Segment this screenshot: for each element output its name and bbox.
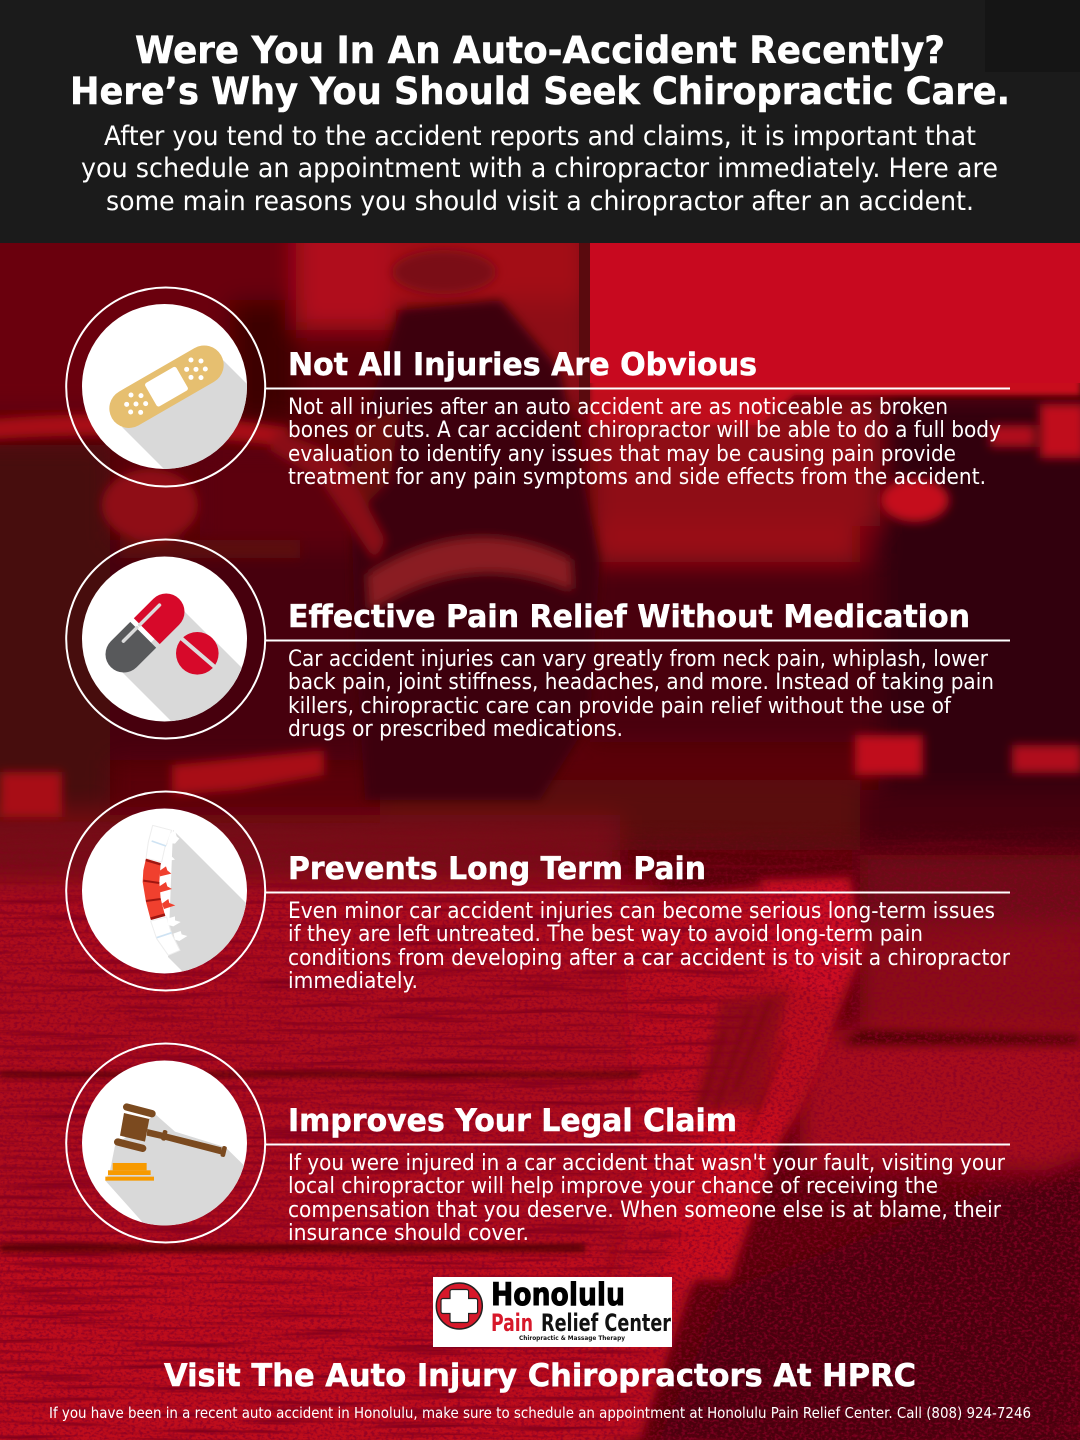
body text: drugs or prescribed medications. — [288, 716, 623, 742]
icon: red cross — [436, 1283, 482, 1329]
body text: killers, chiropractic care can provide pain relief without the use of — [288, 693, 952, 719]
footer heading: Visit The Auto Injury Chiropractors At HPRC — [164, 1358, 916, 1394]
firefighter — [392, 250, 496, 294]
body text: local chiropractor will help improve your chance of receiving the — [288, 1173, 938, 1199]
body text — [288, 1150, 1006, 1246]
body text: insurance should cover. — [288, 1220, 529, 1246]
body text: immediately. — [288, 968, 418, 994]
logo: Honolulu Pain Relief Center: Pain — [491, 1309, 533, 1337]
body text: treatment for any pain symptoms and side effects from the accident. — [288, 464, 986, 490]
heading: Not All Injuries Are Obvious — [288, 347, 757, 383]
intro text: some main reasons you should visit a chiropractor after an accident. — [106, 186, 974, 217]
panel: effective pain relief without medication — [65, 538, 1010, 740]
body text: If you were injured in a car accident that wasn't your fault, visiting your — [288, 1150, 1006, 1176]
header band — [0, 0, 1080, 243]
road — [0, 885, 660, 1245]
intro text: After you tend to the accident reports and claims, it is important that — [104, 121, 976, 152]
heading: Effective Pain Relief Without Medication — [288, 599, 970, 635]
body text: bones or cuts. A car accident chiropractor will be able to do a full body — [288, 417, 1001, 443]
heading: Improves Your Legal Claim — [288, 1103, 737, 1139]
body text: compensation that you deserve. When someone else is at blame, their — [288, 1197, 1002, 1223]
curb — [560, 877, 860, 1440]
title: Were You In An Auto-Accident Recently? — [135, 29, 945, 72]
logo: Honolulu Pain Relief Center: Chiropractic & Massage Therapy — [519, 1334, 626, 1342]
body text: evaluation to identify any issues that may be causing pain provide — [288, 441, 956, 467]
car roof arc and blobs — [0, 414, 290, 446]
logo: Honolulu Pain Relief Center — [433, 1277, 672, 1347]
body text — [288, 646, 994, 742]
body text: back pain, joint stiffness, headaches, and more. Instead of taking pain — [288, 669, 994, 695]
panel: not all injuries are obvious — [65, 286, 1010, 488]
intro text — [81, 121, 998, 217]
icon: bandage — [65, 286, 266, 488]
icon: spine — [65, 790, 266, 992]
heading: Prevents Long Term Pain — [288, 851, 706, 887]
icon: pills — [65, 538, 266, 740]
title: Here’s Why You Should Seek Chiropractic Care. — [70, 70, 1010, 113]
intro text: you schedule an appointment with a chiropractor immediately. Here are — [81, 153, 998, 184]
title — [70, 29, 1010, 113]
logo: Honolulu Pain Relief Center: Honolulu — [491, 1277, 625, 1313]
panel: improves your legal claim — [65, 1042, 1010, 1244]
body text: if they are left untreated. The best way to avoid long-term pain — [288, 921, 923, 947]
body text — [288, 394, 1001, 490]
body text: Car accident injuries can vary greatly from neck pain, whiplash, lower — [288, 646, 989, 672]
body text: Not all injuries after an auto accident are as noticeable as broken — [288, 394, 948, 420]
icon: gavel — [65, 1042, 266, 1244]
logo: Honolulu Pain Relief Center: Relief Center — [541, 1309, 671, 1337]
body text: conditions from developing after a car accident is to visit a chiropractor — [288, 945, 1011, 971]
body text: Even minor car accident injuries can become serious long-term issues — [288, 898, 995, 924]
body text — [288, 898, 1011, 994]
panel: prevents long term pain — [65, 790, 1010, 992]
